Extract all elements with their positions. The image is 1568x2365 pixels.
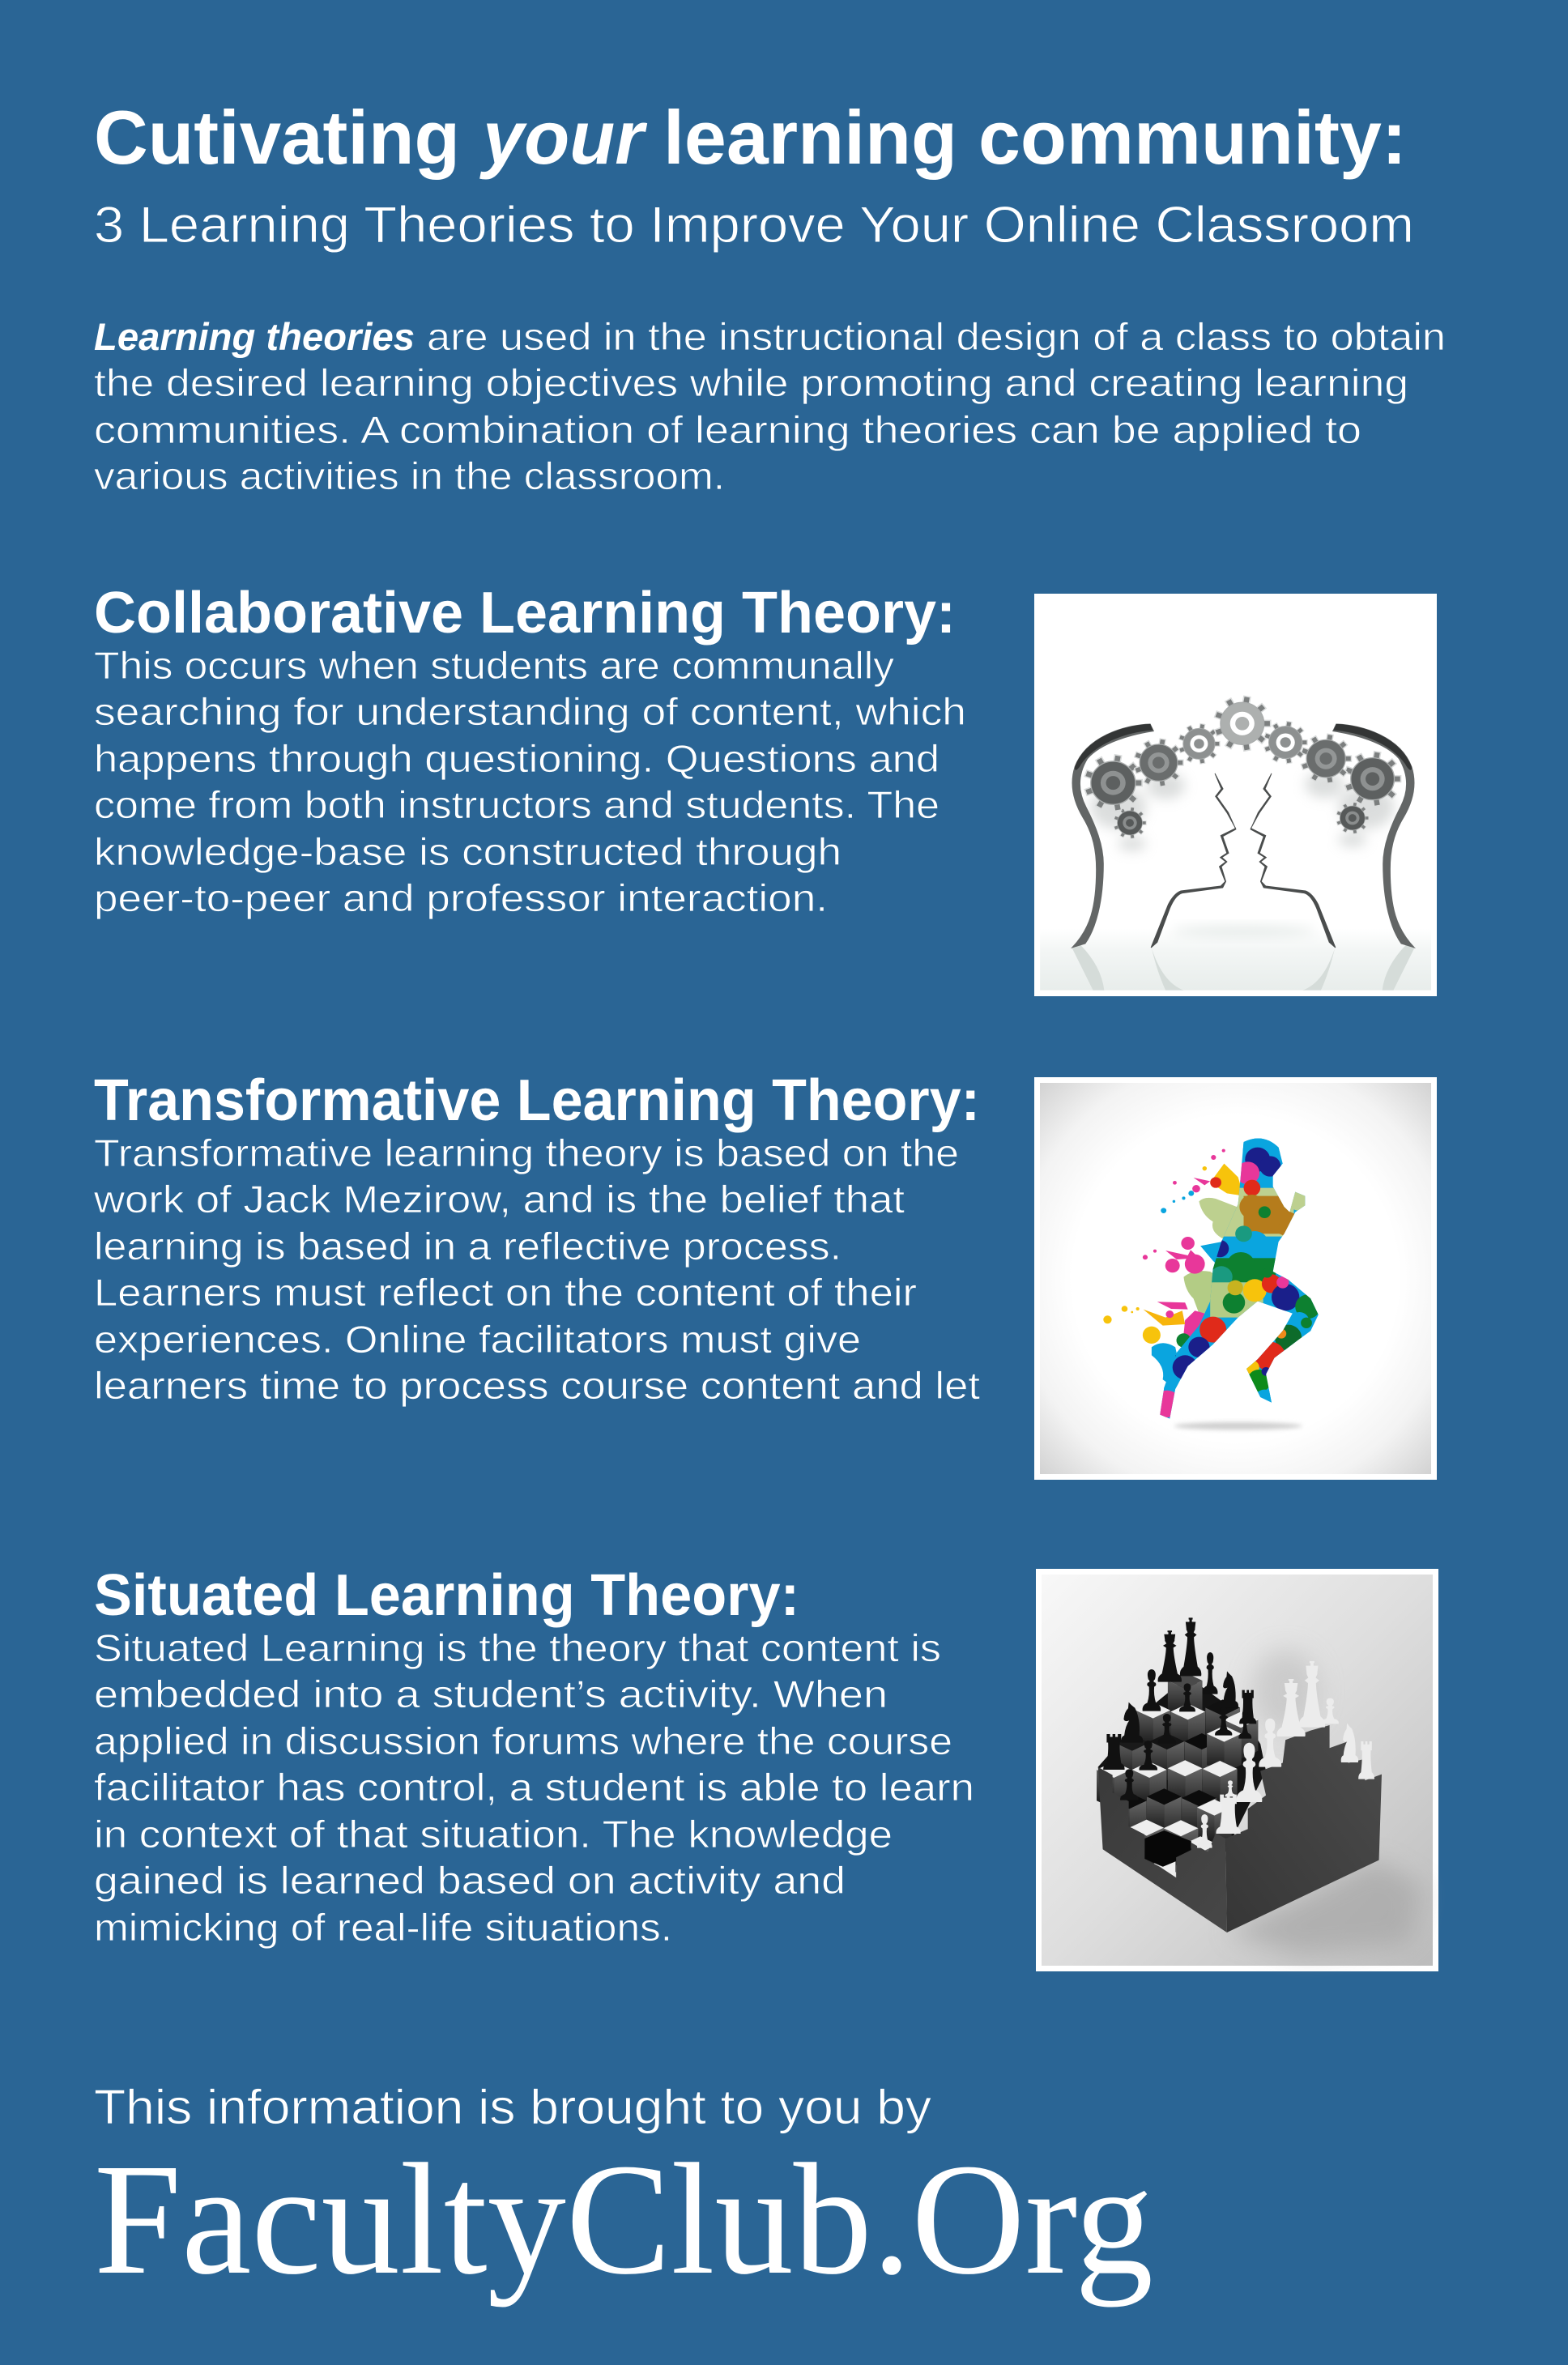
body text: situated: Situated Learning is the theory that content is [94,1626,941,1669]
body text: situated: mimicking of real-life situations. [94,1906,672,1949]
title: your [479,95,647,180]
body text: situated [94,1626,974,1949]
body text: collaborative: peer-to-peer and professor interaction. [94,876,828,919]
body text: transformative: experiences. Online facilitators must give [94,1318,861,1361]
image: two heads with gears [1034,594,1437,996]
body text: situated: in context of that situation. The knowledge [94,1813,893,1856]
body text: collaborative: knowledge-base is constructed through [94,830,842,873]
intro paragraph: various activities in the classroom. [94,454,725,497]
title [94,95,1407,180]
subtitle: 3 Learning Theories to Improve Your Online Classroom [94,197,1414,254]
paint splashes behind the body [1103,1149,1260,1387]
panel: transformative learning theory [93,1068,980,1407]
intro paragraph: Learning theories [94,315,415,358]
image: three-dimensional stepped chess board [1036,1569,1438,1971]
body text: transformative: Transformative learning theory is based on the [94,1131,959,1174]
white chess pieces [1197,1661,1374,1848]
body text: situated: gained is learned based on activity and [94,1859,846,1902]
title: learning community: [663,95,1407,180]
white stair face [1225,1725,1382,1932]
body text: collaborative: This occurs when students are communally [94,644,895,687]
body text: transformative: learning is based in a reflective process. [94,1225,842,1268]
body text: collaborative: happens through questioning. Questions and [94,737,940,780]
heading: transformative: Transformative Learning Theory: [94,1068,980,1133]
body text: collaborative [94,644,966,919]
footer: attribution line: This information is brought to you by [94,2080,931,2134]
body text: transformative [93,1131,980,1407]
heading: situated: Situated Learning Theory: [94,1563,799,1628]
body text: collaborative: searching for understanding of content, which [94,690,966,733]
body text: collaborative: come from both instructors and students. The [94,783,940,826]
black stair block [1097,1673,1266,1932]
panel: situated learning theory [94,1563,974,1949]
black chess pieces [1103,1617,1256,1800]
body text: situated: applied in discussion forums where the course [94,1719,952,1762]
body text: situated: embedded into a student’s activity. When [94,1673,888,1715]
image: colourful splattered runner [1034,1077,1437,1480]
body text: situated: facilitator has control, a student is able to learn [94,1766,974,1809]
title: Cutivating [94,95,460,180]
footer: FacultyClub.Org wordmark: FacultyClub.Org [94,2130,1153,2307]
body text: transformative: work of Jack Mezirow, and is the belief that [93,1178,905,1221]
gears [1084,696,1401,839]
panel: collaborative learning theory [94,581,966,919]
body text: transformative: Learners must reflect on the content of their [94,1271,917,1314]
heading: collaborative: Collaborative Learning Theory: [94,581,956,646]
body text: transformative: learners time to process course content and let [94,1364,980,1407]
intro paragraph: are used in the instructional design of a class to obtain [427,315,1446,358]
intro paragraph [94,315,1446,497]
intro paragraph: communities. A combination of learning theories can be applied to [94,408,1361,451]
intro paragraph: the desired learning objectives while promoting and creating learning [94,361,1408,404]
body of the runner [1160,1139,1319,1419]
